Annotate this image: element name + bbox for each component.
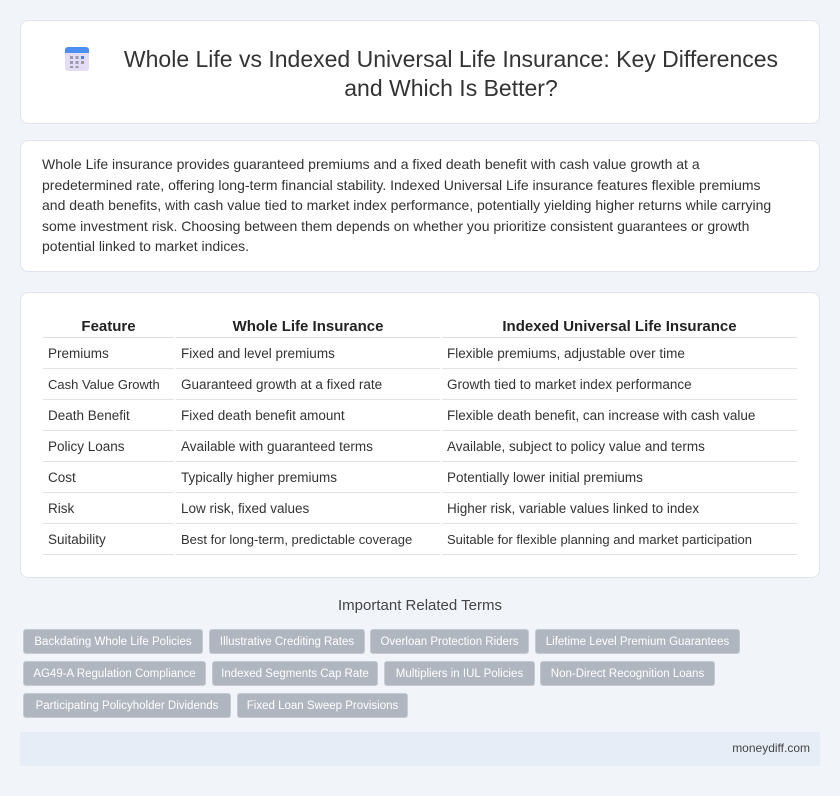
related term tags: Backdating Whole Life Policies: [34, 636, 192, 648]
related term tags: Indexed Segments Cap Rate: [221, 668, 369, 680]
comparison table card: Policy Loans: [48, 438, 125, 454]
comparison table card: Flexible premiums, adjustable over time: [447, 346, 685, 360]
comparison table card: Flexible death benefit, can increase with cash value: [447, 408, 755, 422]
title: and Which Is Better?: [344, 75, 558, 101]
related term tags: Illustrative Crediting Rates: [220, 636, 354, 648]
comparison table card: Low risk, fixed values: [181, 500, 309, 516]
intro text card: potential linked to market indices.: [42, 238, 249, 254]
comparison table card: Typically higher premiums: [181, 470, 337, 484]
comparison table card: Available, subject to policy value and terms: [447, 438, 705, 454]
comparison table card: Higher risk, variable values linked to index: [447, 500, 699, 516]
title: [124, 46, 778, 101]
intro text card: and death benefits, with cash value tied to market index performance, potentially yielding higher returns while carrying: [42, 197, 771, 213]
comparison table card: Suitability: [48, 532, 106, 546]
comparison table card: Cost: [48, 470, 76, 484]
comparison table card: Available with guaranteed terms: [181, 438, 373, 454]
comparison table card: [20, 292, 820, 578]
comparison table card: Fixed and level premiums: [181, 346, 335, 360]
comparison table card: Feature: [81, 318, 136, 334]
related terms heading: Important Related Terms: [338, 597, 502, 614]
comparison table card: Indexed Universal Life Insurance: [502, 318, 737, 334]
header card: [20, 20, 820, 124]
related term tags: AG49-A Regulation Compliance: [33, 668, 196, 680]
comparison table card: Whole Life Insurance: [233, 318, 383, 334]
comparison table card: Risk: [48, 500, 74, 516]
comparison table card: Guaranteed growth at a fixed rate: [181, 376, 382, 392]
intro text card: Whole Life insurance provides guaranteed premiums and a fixed death benefit with cash value growth at a: [42, 156, 700, 172]
related term tags: Overloan Protection Riders: [380, 636, 519, 648]
icon: calendar: [65, 47, 89, 71]
intro text card: some investment risk. Choosing between them depends on whether you prioritize consistent guarantees or growth: [42, 218, 749, 234]
comparison table card: Premiums: [48, 346, 109, 360]
related term tags: Multipliers in IUL Policies: [396, 668, 523, 680]
comparison table card: Death Benefit: [48, 408, 130, 422]
comparison table card: Cash Value Growth: [48, 376, 160, 392]
title: Whole Life vs Indexed Universal Life Insurance: Key Differences: [124, 46, 778, 72]
comparison table card: Suitable for flexible planning and market participation: [447, 532, 752, 546]
related term tags: Participating Policyholder Dividends: [36, 700, 218, 712]
footer: moneydiff.com: [732, 741, 810, 755]
intro text card: predetermined rate, offering long-term financial stability. Indexed Universal Life insurance features flexible premiums: [42, 176, 761, 192]
comparison table card: Best for long-term, predictable coverage: [181, 532, 412, 546]
intro text card: [20, 140, 820, 272]
related term tags: Lifetime Level Premium Guarantees: [546, 636, 729, 648]
related term tags: Non-Direct Recognition Loans: [551, 668, 704, 680]
comparison table card: Potentially lower initial premiums: [447, 470, 643, 484]
related term tags: Fixed Loan Sweep Provisions: [247, 700, 398, 712]
comparison table card: Fixed death benefit amount: [181, 408, 345, 422]
footer: [20, 732, 820, 766]
comparison table card: Growth tied to market index performance: [447, 376, 692, 392]
